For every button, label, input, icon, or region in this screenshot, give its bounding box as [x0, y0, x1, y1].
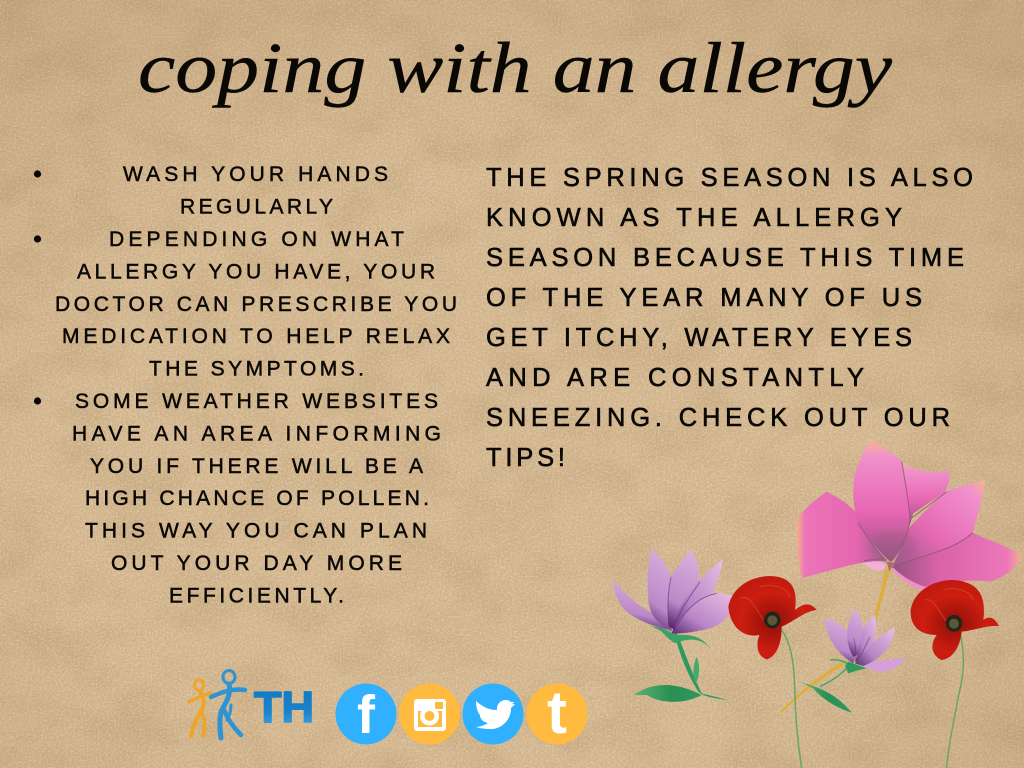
text block: spring season intro: SEASON BECAUSE THIS TIME	[486, 244, 964, 272]
title: coping with an allergy	[138, 28, 892, 108]
logo: TH	[189, 670, 314, 738]
tip: pollen forecasts: THIS WAY YOU CAN PLAN	[85, 520, 427, 543]
tip: pollen forecasts	[72, 390, 441, 607]
tip: wash your hands	[123, 163, 388, 218]
icon: left red poppy	[728, 576, 817, 768]
text block: spring season intro: GET ITCHY, WATERY EYES	[486, 324, 912, 352]
tip: doctor medication: MEDICATION TO HELP RELAX	[62, 325, 450, 348]
text block: spring season intro: TIPS!	[486, 444, 565, 472]
icon: facebook: f	[357, 685, 376, 745]
bullet 3	[34, 397, 41, 405]
icon: facebook	[336, 684, 396, 745]
tip: pollen forecasts: OUT YOUR DAY MORE	[111, 552, 402, 575]
tip: pollen forecasts: EFFICIENTLY.	[169, 584, 344, 607]
tip: pollen forecasts: YOU IF THERE WILL BE A	[90, 455, 423, 478]
icon: instagram	[399, 684, 460, 744]
tip: doctor medication: ALLERGY YOU HAVE, YOUR	[77, 260, 435, 283]
tip: doctor medication: DOCTOR CAN PRESCRIBE YOU	[55, 293, 457, 316]
tip: wash your hands: REGULARLY	[180, 195, 333, 218]
illustration: watercolor flowers	[613, 439, 1023, 768]
logo wordmark: TH	[254, 683, 314, 732]
icon: blue figure	[211, 670, 245, 738]
text block: spring season intro: AND ARE CONSTANTLY	[486, 364, 864, 392]
icon: large pink flower	[796, 439, 1023, 591]
tip: doctor medication: DEPENDING ON WHAT	[109, 228, 404, 251]
tip: pollen forecasts: SOME WEATHER WEBSITES	[75, 390, 438, 413]
tip: wash your hands: WASH YOUR HANDS	[123, 163, 388, 186]
icon: right red poppy	[911, 580, 999, 768]
icon: twitter	[462, 684, 524, 744]
tip: doctor medication: THE SYMPTOMS.	[149, 358, 364, 381]
text block: spring season intro	[486, 164, 973, 472]
tip: doctor medication	[55, 228, 457, 381]
icon: large lilac flower	[613, 548, 734, 702]
icon: orange figure	[189, 680, 211, 736]
text block: spring season intro: KNOWN AS THE ALLERGY	[486, 204, 902, 232]
bullet 1	[34, 170, 41, 178]
tip: pollen forecasts: HIGH CHANCE OF POLLEN.	[85, 487, 429, 510]
bullet 2	[34, 235, 41, 243]
tip: pollen forecasts: HAVE AN AREA INFORMING	[72, 422, 441, 445]
icon: small lilac flower	[799, 608, 905, 713]
panel: left bulleted tips	[34, 163, 457, 607]
icon: tumblr: t	[547, 679, 567, 746]
icon: yellow stem of pink flower	[781, 570, 889, 712]
text block: spring season intro: THE SPRING SEASON IS ALSO	[486, 164, 973, 192]
text block: spring season intro: OF THE YEAR MANY OF US	[486, 284, 922, 312]
text block: spring season intro: SNEEZING. CHECK OUT OUR	[486, 404, 950, 432]
icon: tumblr	[526, 679, 588, 746]
